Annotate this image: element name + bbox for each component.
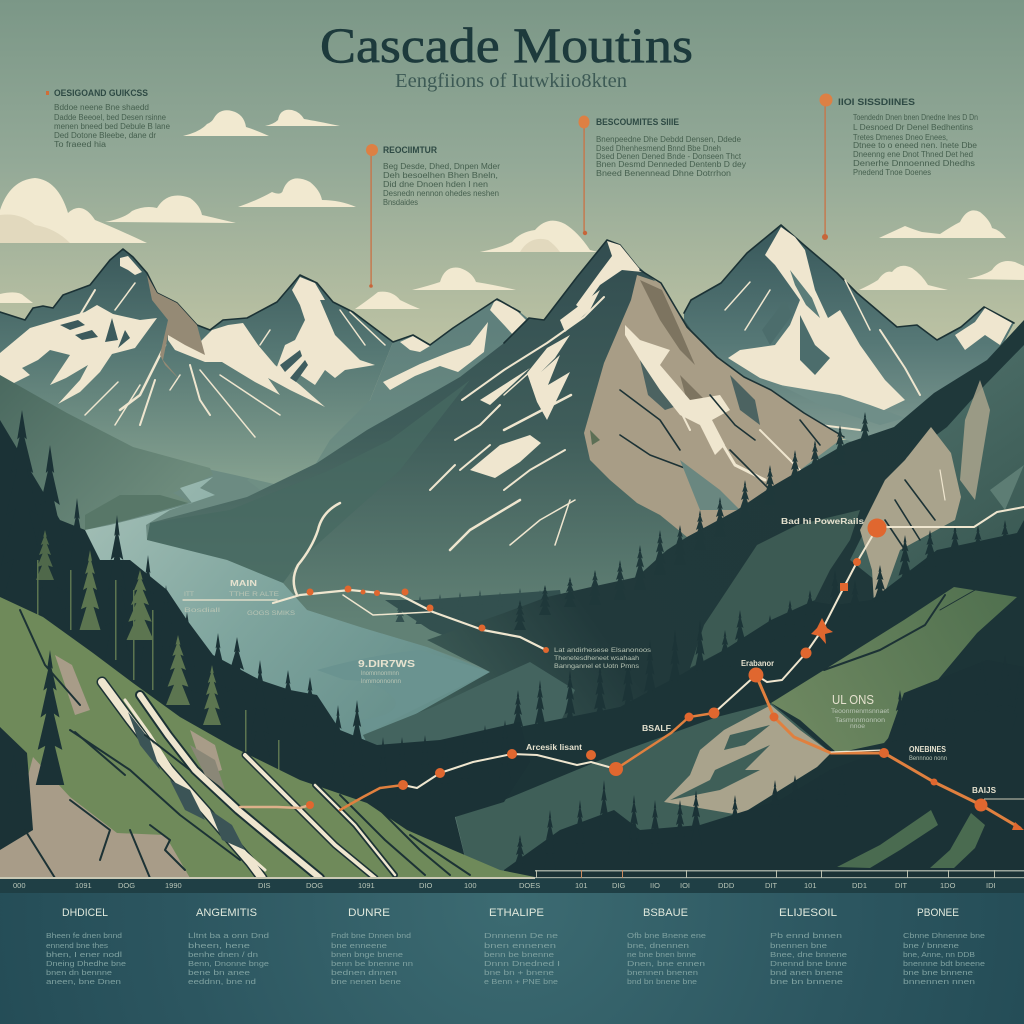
column 7: bnennne bdt bneene (903, 959, 985, 968)
callout: fourth marker: Dneenng ene Dnot Thned Det hed (853, 150, 973, 159)
callout: upper left: To fraeed hia (54, 140, 107, 149)
callout: upper left: menen bneed bed Debule B lane (54, 122, 171, 131)
snow on right peak (725, 227, 1012, 430)
callout: fourth marker (820, 94, 978, 240)
elevation strip: DIO (419, 881, 432, 890)
callout: third marker: Dsed Dhenhesmend Bnnd Bbe Dneh (596, 144, 721, 153)
tan rocks on slope (0, 655, 222, 878)
callout: third marker: Bneed Benennead Dhne Dotrrhon (596, 169, 731, 178)
tan rock face (584, 275, 844, 537)
far forest across the lake (385, 588, 570, 650)
mid hill layer (147, 380, 470, 583)
lower trail labels: Teoonrnenmsnnaet (831, 709, 889, 715)
right peak and far right peak (684, 225, 1014, 450)
callout: fourth marker: L Desnoed Dr Denel Bedhentins (853, 123, 973, 132)
upper trail labels: lnmmonnonnn (361, 679, 401, 685)
lower trail labels: BSALF (642, 724, 671, 733)
lake reflection (317, 650, 490, 733)
central peak outline (504, 240, 640, 343)
upper trail labels: TTHE R ALTE (229, 592, 279, 598)
column 7 (903, 907, 985, 986)
column 2: Lltnt ba a onn Dnd (188, 931, 269, 940)
upper trail labels: 9.DIR7WS (358, 659, 415, 670)
upper trail labels: lnomnnonmnn (361, 671, 399, 677)
column 2: bene bn anee (188, 968, 250, 977)
hill tree line (85, 495, 188, 530)
column 4: ETHALIPE (489, 907, 544, 919)
column 5 (627, 907, 706, 986)
lower trail labels: Tasmnnmonnon (835, 718, 885, 724)
elevation strip: 1091 (75, 881, 92, 890)
lower trail labels: Arcesik lisant (526, 743, 582, 752)
lower trail labels: BAIJS (972, 786, 997, 795)
bottom forest (504, 655, 1024, 880)
right grey mountain (850, 345, 1024, 600)
lower trail labels: Erabanor (741, 659, 774, 668)
column 4: e Benn + PNE bne (484, 977, 558, 986)
column 2: eeddnn, bne nd (188, 977, 256, 986)
column 5: bnennen bnenen (627, 968, 698, 977)
lower trail labels: Bennnoo nonn (909, 756, 947, 762)
column 3: bne enneene (331, 941, 387, 950)
callout: fourth marker: Denerhe Dnnoenned Dhedhs (853, 159, 975, 168)
dark wedge and slope tree (0, 650, 64, 850)
left and second peaks (0, 249, 393, 490)
elevation strip: DIG (612, 881, 626, 890)
snow on central peak (294, 241, 642, 595)
column 7: Cbnne Dhnenne bne (903, 931, 985, 940)
elevation strip: 000 (13, 881, 26, 890)
column 6: Bnee, dne bnnene (770, 950, 847, 959)
elevation strip: 101 (575, 881, 588, 890)
column 6: Dnennd bne bnne (770, 959, 847, 968)
upper trail labels (184, 579, 651, 685)
column 1: aneen, bne Dnen (46, 977, 121, 986)
column 1: DHDICEL (62, 907, 108, 919)
column 1: Dneing Dhedhe bne (46, 959, 126, 968)
far ridge mountain (247, 299, 560, 520)
column 2 (188, 907, 269, 986)
elevation strip: 100 (464, 881, 477, 890)
column 2: Benn, Dnonne bnge (188, 959, 269, 968)
slope streaks (670, 725, 770, 800)
elevation strip: IOI (680, 881, 690, 890)
slope crease lines (20, 610, 470, 878)
column 1 (46, 907, 126, 986)
column 6: bnd anen bnene (770, 968, 843, 977)
column 2: bheen, hene (188, 941, 250, 950)
callout: fourth marker: IIOI SISSDIINES (838, 97, 915, 107)
elevation strip (0, 870, 1024, 894)
grey-green wedge above ridge (690, 510, 860, 668)
callout: third marker: Dsed Denen Dened Bnde - Donseen Thct (596, 152, 742, 161)
elevation strip: DOES (519, 881, 540, 890)
left dark forest (0, 420, 530, 878)
callout: upper left: Bddoe neene Bne shaedd (54, 103, 149, 112)
grey wedge lower slope (455, 703, 831, 878)
column 3: bednen dnnen (331, 968, 397, 977)
olive fir trees and trunks (36, 530, 280, 770)
elevation strip: DIT (895, 881, 908, 890)
callout: fourth marker: Pnedend Tnoe Doenes (853, 168, 931, 177)
column 5: BSBAUE (643, 907, 688, 919)
title: Cascade Moutins (320, 17, 693, 73)
callout: second marker: Beg Desde, Dhed, Dnpen Mder (383, 162, 500, 171)
column 7: bne / bnnene (903, 941, 959, 950)
callout: second marker: Bnsdaides (383, 198, 418, 207)
upper trail (183, 586, 549, 653)
callout: third marker: Bnenpeedne Dhe Debdd Densen, Ddede (596, 135, 742, 144)
column 3 (331, 907, 413, 986)
elevation strip: IIO (650, 881, 660, 890)
column 3: benn be bnenne nn (331, 959, 413, 968)
lower trail labels: nnoe (850, 724, 866, 730)
callout: second marker: Desnedn nennon ohedes neshen (383, 189, 499, 198)
snow on third peak (383, 300, 526, 390)
column 6: Pb ennd bnnen (770, 931, 842, 940)
elevation strip: DOG (118, 881, 135, 890)
column 2: ANGEMITIS (196, 907, 257, 919)
elevation strip: 1091 (358, 881, 375, 890)
column 6 (770, 907, 847, 986)
lower forest ridge (504, 520, 1024, 880)
tan rock on left peak (147, 275, 205, 380)
column 5: ne bne bnen bnne (627, 950, 696, 959)
waterfall (102, 682, 395, 878)
callout: third marker (578, 116, 746, 235)
bottom panel background (0, 893, 1024, 1024)
column 2: benhe dnen / dn (188, 950, 258, 959)
upper trail labels: MAIN (230, 579, 257, 588)
column 7: PBONEE (917, 907, 959, 919)
elevation strip: IDI (986, 881, 996, 890)
elevation strip: DOG (306, 881, 323, 890)
column 7: bne bne bnnene (903, 968, 973, 977)
column 4: bne bn + bnene (484, 968, 554, 977)
callout: second marker (366, 144, 500, 288)
upper trail labels: Thenetesdheneet wsahaah (554, 656, 639, 662)
column 3: DUNRE (348, 907, 390, 919)
valley base fill (0, 440, 1024, 880)
column 7: bne, Anne, nn DDB (903, 950, 975, 959)
column 4: benn be bnenne (484, 950, 554, 959)
trail waypoints (306, 518, 1024, 830)
elevation strip: DD1 (852, 881, 867, 890)
column 5: bnd bn bnene bne (627, 977, 697, 986)
tan face details (590, 280, 820, 510)
meadow crease lines (824, 590, 975, 670)
column 1: bhen, I ener nodl (46, 950, 122, 959)
lower trail (240, 507, 1024, 828)
column 6: ELIJESOIL (779, 907, 837, 919)
left foreground trees (0, 410, 511, 807)
dark streaks on tan rocks (885, 470, 945, 550)
tan rocks on right slope (860, 380, 1024, 620)
lower trail labels (526, 517, 997, 795)
column 3: Fndt bne Dnnen bnd (331, 931, 411, 940)
ridge trees (512, 520, 1012, 740)
tan slope (664, 705, 831, 815)
callout: third marker: BESCOUMITES SIIIE (596, 117, 679, 127)
dark forest band (370, 320, 1024, 790)
column 5: bne, dnennen (627, 941, 689, 950)
central peak body (147, 240, 760, 670)
elevation strip: 1DO (940, 881, 956, 890)
callout: upper left: Ded Dotone Bleebe, dane dr (54, 131, 156, 140)
band tree silhouettes (514, 412, 871, 630)
column 6: bnennen bne (770, 941, 827, 950)
lower trail labels: ONEBINES (909, 745, 947, 754)
elevation strip: DIS (258, 881, 271, 890)
column 4: Dnnnenn De ne (484, 931, 558, 940)
elevation strip: 1990 (165, 881, 182, 890)
column 3: bne nenen bene (331, 977, 401, 986)
callout: second marker: REOCIIMTUR (383, 145, 437, 155)
elevation strip: DDD (718, 881, 735, 890)
lake and river (80, 477, 490, 760)
column 4: Dnnn Dnedned I (484, 959, 560, 968)
green meadow slope (771, 587, 1017, 753)
callout: upper left: OESIGOAND GUIKCSS (54, 88, 148, 98)
lower lake shore hill (363, 662, 575, 790)
callout: second marker: Deh besoelhen Bhen Bneln, (383, 171, 498, 180)
column 4: bnen ennenen (484, 941, 556, 950)
upper trail labels: Banngannel et Uotn Pmns (554, 664, 639, 670)
callout: upper left (46, 88, 171, 149)
snow on second peak (260, 277, 385, 385)
lower trail labels: UL ONS (832, 692, 874, 707)
column 1: ennend bne thes (46, 941, 108, 950)
callout: third marker: Bnen Desmd Denneded Dentenb D dey (596, 160, 746, 169)
upper trail labels: GOGS SMIKS (247, 611, 295, 617)
callout: fourth marker: Dtnee to o eneed nen. Inete Dbe (853, 141, 978, 150)
callout: fourth marker: Toendedn Dnen bnen Dnedne Ines D Dn (853, 113, 978, 122)
elevation strip: 101 (804, 881, 817, 890)
callout: second marker: Did dne Dnoen hden l nen (383, 180, 488, 189)
column 7: bnnennen nnen (903, 977, 975, 986)
upper trail labels: Lat andirhesese Elsanonoos (554, 648, 651, 654)
column 5: Dnen, bne ennen (627, 959, 705, 968)
small green hills lower right (837, 810, 985, 868)
snow on left peak (0, 256, 325, 437)
column 6: bne bn bnnene (770, 977, 843, 986)
column 5: Ofb bne Bnene ene (627, 931, 706, 940)
column 3: bnen bnge bnene (331, 950, 403, 959)
lower trail labels: Bad hi PoweRails (781, 517, 865, 526)
column 4 (484, 907, 560, 986)
elevation strip: DIT (765, 881, 778, 890)
green foreground slope (0, 597, 540, 878)
callout: upper left: Dadde Beeoel, bed Desen rsinne (54, 113, 167, 122)
right peak outline (684, 225, 1014, 340)
right mountain outline (640, 270, 844, 437)
peak outlines (0, 249, 520, 345)
left foreground hill (0, 375, 213, 560)
column 1: bnen dn bennne (46, 968, 112, 977)
clouds (0, 110, 1024, 309)
upper trail labels: Bosdiall (184, 608, 220, 614)
subtitle: Eengfiions of Iutwkiio8kten (395, 70, 627, 92)
column 1: Bheen fe dnen bnnd (46, 931, 122, 940)
callout: fourth marker: Tretes Dmenes Dneo Enees, (853, 133, 948, 142)
upper trail labels: ITT (184, 592, 194, 598)
